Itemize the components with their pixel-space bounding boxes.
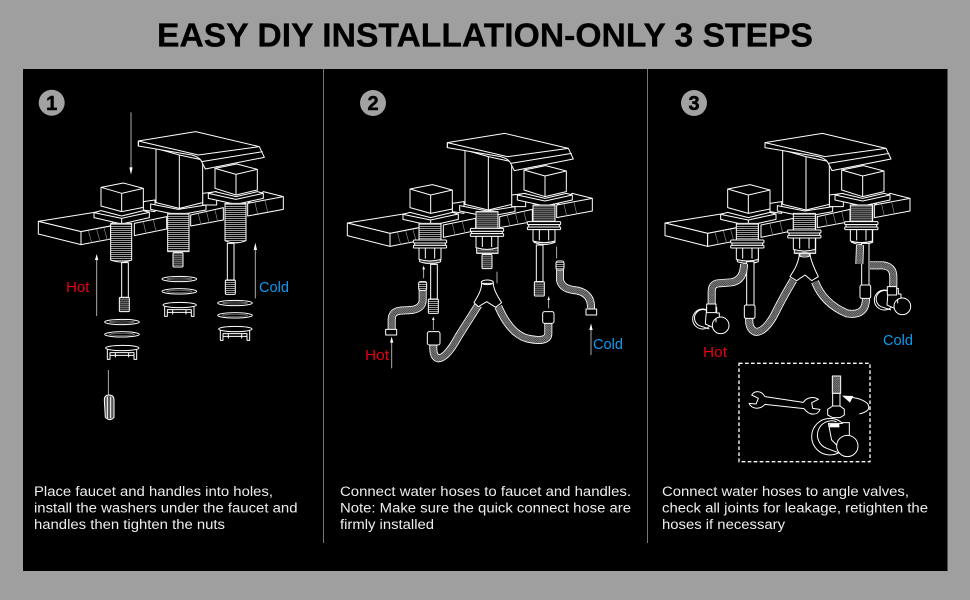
black instructions board [23, 69, 948, 571]
step number 1: 1 [46, 93, 57, 115]
panel: step 2 [340, 90, 631, 533]
step 3 instructions: check all joints for leakage, retighten the [662, 500, 928, 516]
faucet connected to valves diagram [665, 133, 911, 462]
column divider 1 [323, 69, 324, 543]
title: EASY DIY INSTALLATION-ONLY 3 STEPS [157, 16, 813, 54]
step 1 instructions: install the washers under the faucet and [34, 500, 298, 516]
faucet with hoses diagram [347, 133, 597, 368]
column divider 2 [647, 69, 648, 543]
step 2 instructions: Connect water hoses to faucet and handles. [340, 484, 631, 500]
step number 3 [681, 90, 707, 116]
step 3 instructions: Connect water hoses to angle valves, [662, 484, 909, 500]
step 3 instructions: hoses if necessary [662, 517, 786, 533]
step number 3: 3 [688, 93, 700, 115]
step number 1 [39, 90, 65, 116]
Hot label: Hot [365, 347, 390, 364]
step number 2: 2 [367, 93, 379, 115]
step 1 instructions: handles then tighten the nuts [34, 517, 225, 533]
wrench [749, 392, 820, 414]
Cold label: Cold [593, 336, 623, 353]
step 3 instructions [662, 484, 928, 533]
faucet exploded diagram [38, 112, 283, 420]
hose end and valve [812, 376, 869, 457]
panel: step 1 [34, 90, 298, 533]
step 2 instructions: Note: Make sure the quick connect hose are [340, 500, 631, 516]
Cold label: Cold [259, 279, 289, 296]
step 1 instructions [34, 484, 298, 533]
step 1 instructions: Place faucet and handles into holes, [34, 484, 273, 500]
Cold label: Cold [883, 332, 913, 349]
Hot label: Hot [703, 344, 728, 361]
dashed inset [739, 363, 870, 462]
Hot label: Hot [66, 279, 90, 296]
step 2 instructions [340, 484, 631, 533]
step 2 instructions: firmly installed [340, 517, 434, 533]
panel: step 3 [662, 90, 928, 533]
step number 2 [360, 90, 386, 116]
